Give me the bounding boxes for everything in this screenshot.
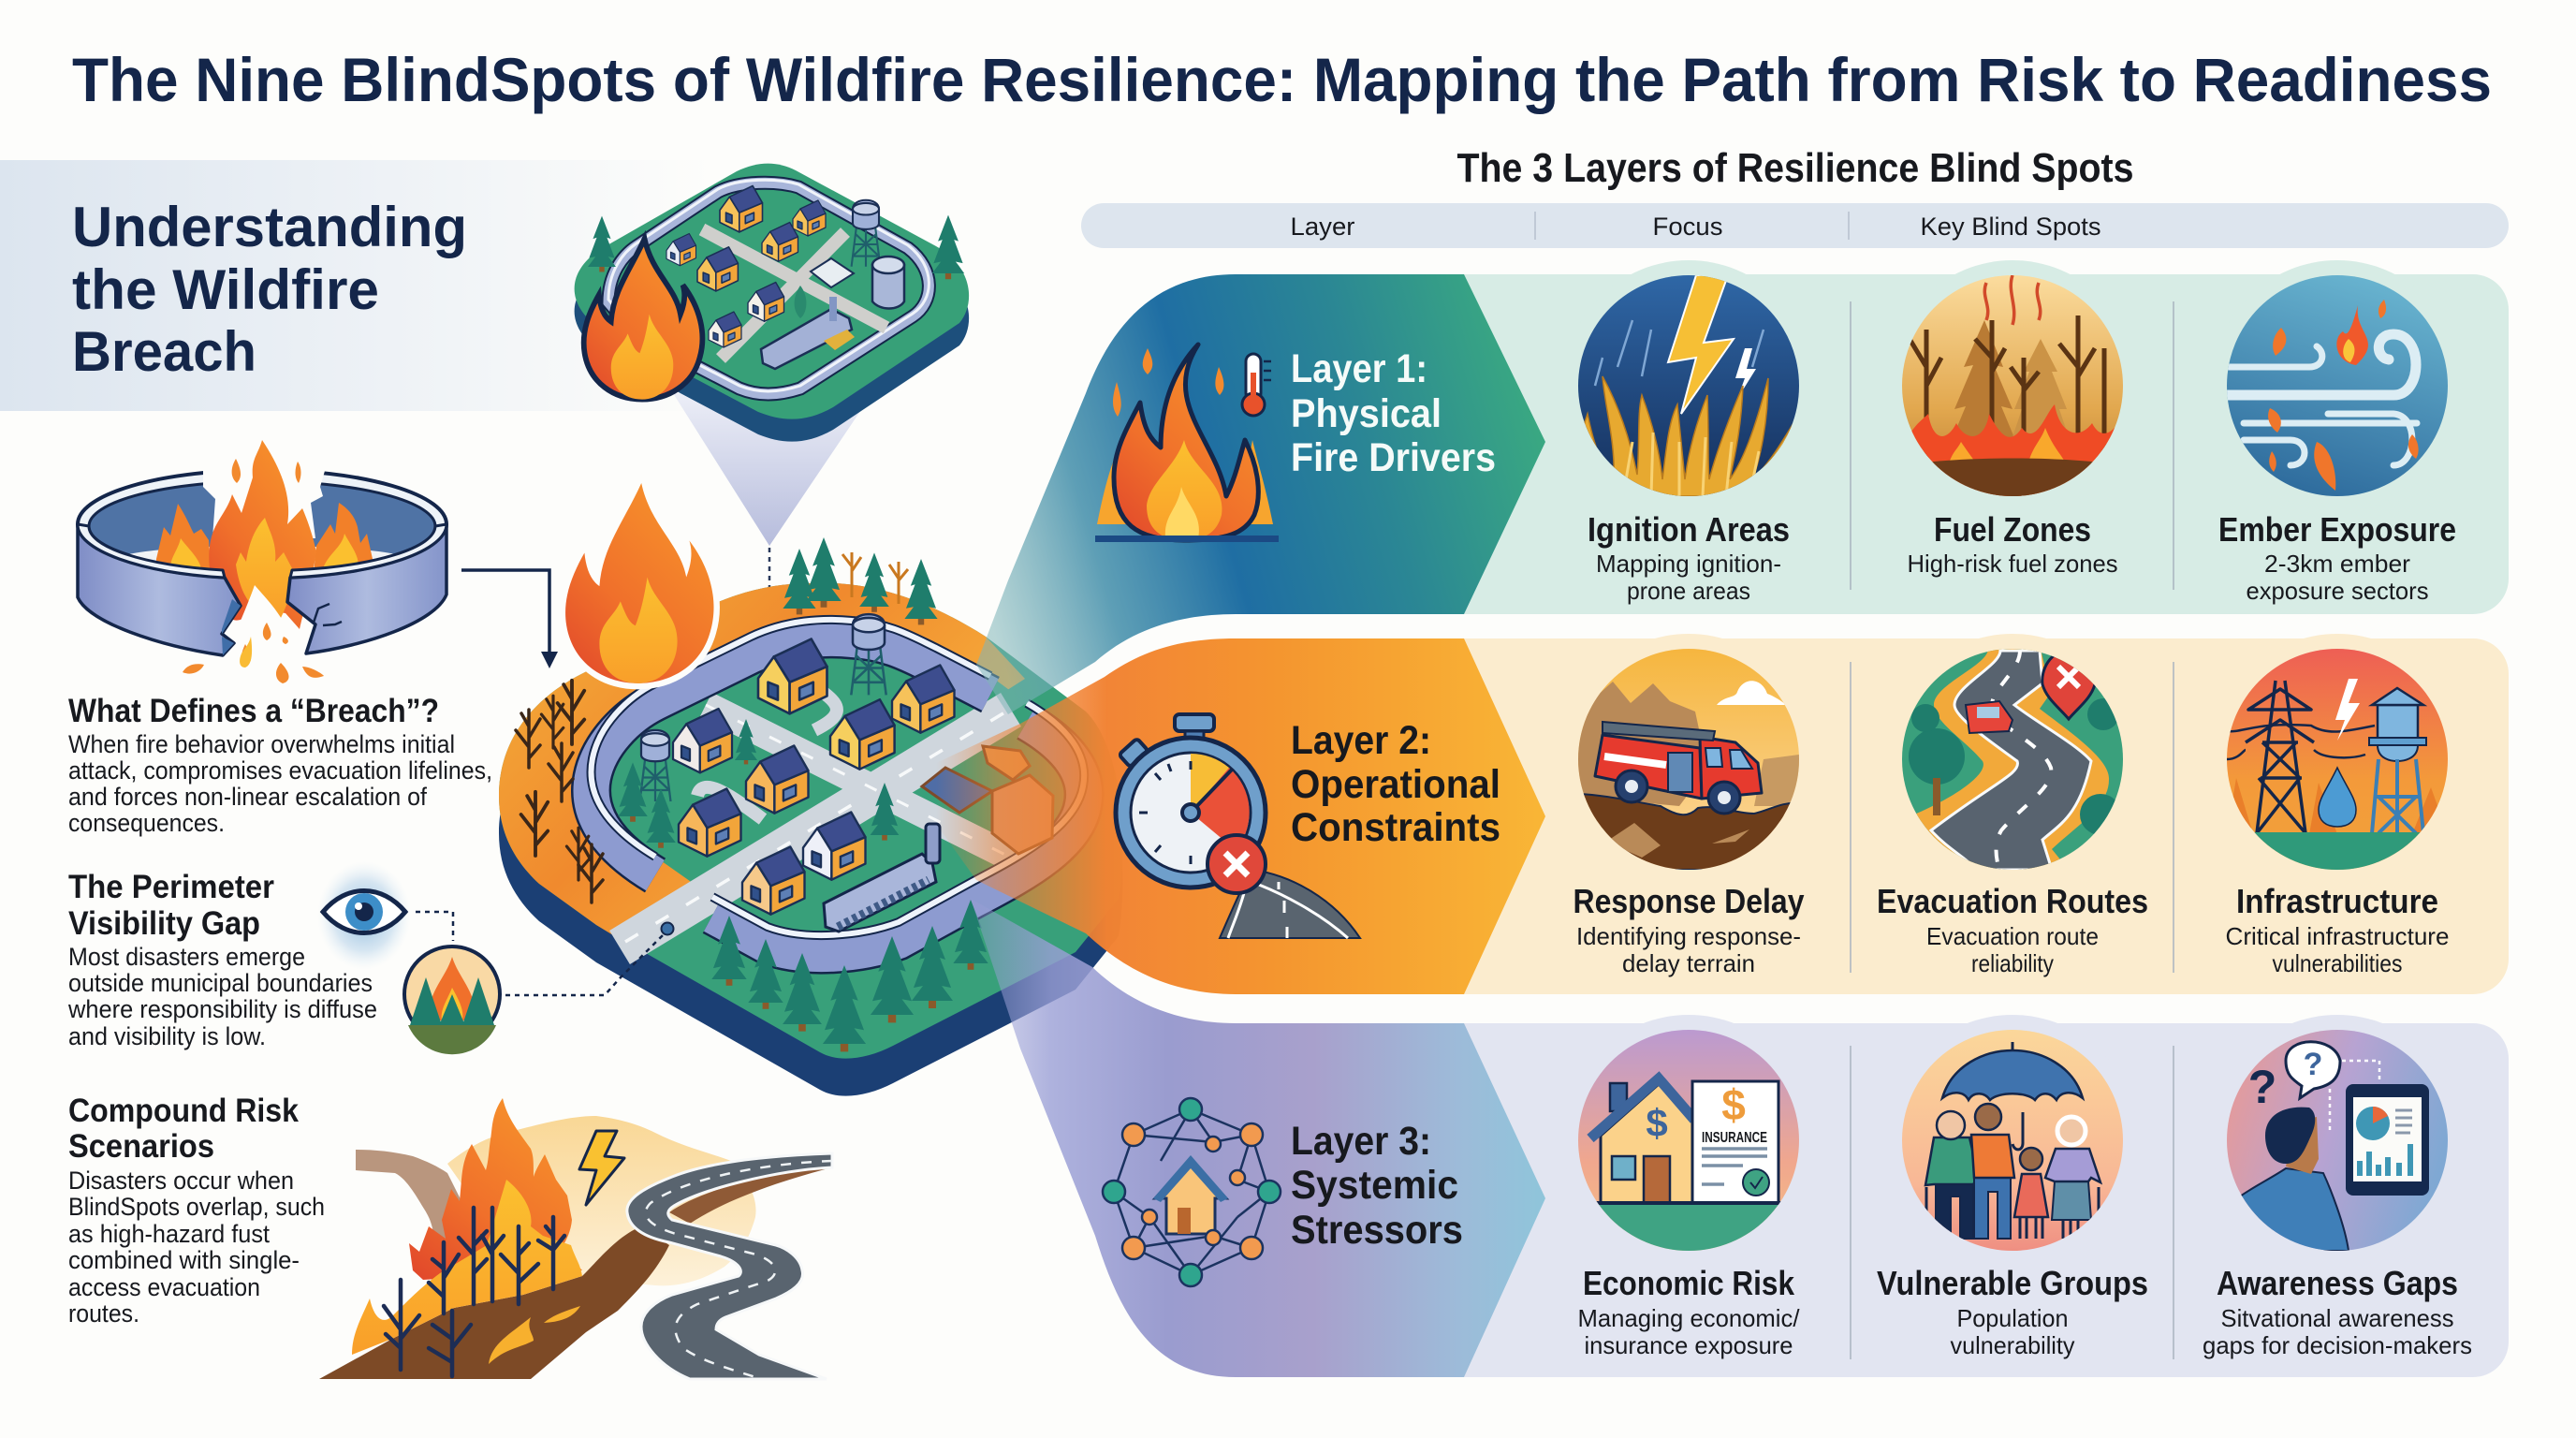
icon: economic risk circle: INSURANCE — [1702, 1130, 1767, 1146]
label row: layer 2 blind spots: Evacuation route — [1926, 922, 2099, 950]
label row: layer 3 blind spots — [1578, 1264, 2472, 1359]
table header pill: Focus — [1653, 213, 1722, 241]
label row: layer 2 blind spots: Identifying response- — [1576, 922, 1801, 950]
label row: layer 3 blind spots: insurance exposure — [1584, 1331, 1793, 1359]
label row: layer 1 blind spots — [1588, 510, 2456, 605]
text block: Compound Risk Scenarios: as high-hazard fust — [68, 1220, 271, 1248]
label row: layer 3 blind spots: Population — [1956, 1304, 2069, 1332]
label: layer 3 — [1291, 1119, 1463, 1253]
table heading: The 3 Layers of Resilience Blind Spots — [1456, 145, 2134, 191]
label row: layer 3 blind spots: Sitvational awareness — [2220, 1304, 2454, 1332]
icon: fuel zones circle — [1902, 275, 2123, 496]
text block: What Defines a Breach: consequences. — [68, 809, 225, 837]
icon: layer 1 flame and thermometer — [1095, 345, 1279, 542]
icon: layer 2 stopwatch with road — [1116, 714, 1360, 938]
section banner: Understanding the Wildfire Breach: Understanding — [72, 196, 467, 258]
label: layer 3: Stressors — [1291, 1208, 1463, 1253]
label: layer 1 — [1291, 346, 1496, 480]
label row: layer 1 blind spots: Ember Exposure — [2218, 510, 2456, 549]
beam: layer 1 chevron — [976, 274, 1545, 714]
icon: eye with glow — [317, 861, 411, 970]
label row: layer 2 blind spots: reliability — [1971, 949, 2054, 977]
label row: layer 1 blind spots: exposure sectors — [2247, 577, 2428, 605]
label row: layer 3 blind spots: vulnerability — [1951, 1331, 2074, 1359]
label row: layer 1 blind spots: prone areas — [1627, 577, 1750, 605]
panel: layer 1 background — [1217, 260, 2509, 614]
text block: What Defines a Breach: attack, compromises evacuation lifelines, — [68, 756, 492, 785]
icon: awareness gaps circle: ? — [2304, 1047, 2322, 1082]
title: The Nine BlindSpots of Wildfire Resilience: Mapping the Path from Risk to Readiness — [72, 45, 2492, 114]
label: layer 3: Layer 3: — [1291, 1119, 1431, 1164]
text block: Compound Risk Scenarios: Compound Risk — [68, 1093, 299, 1129]
beam: layer 3 chevron — [971, 899, 1545, 1377]
illustration: compound risk scene — [319, 1098, 832, 1379]
icon: large flame above town — [565, 483, 714, 683]
label row: layer 1 blind spots: Ignition Areas — [1588, 510, 1790, 549]
label row: layer 2 blind spots: Infrastructure — [2236, 882, 2438, 920]
label row: layer 1 blind spots: High-risk fuel zones — [1908, 550, 2117, 578]
icon: response delay circle — [1578, 649, 1799, 870]
text block: The Perimeter Visibility Gap: Most disasters emerge — [68, 943, 305, 971]
panel: layer 2 background — [1217, 634, 2509, 994]
text block: The Perimeter Visibility Gap: and visibility is low. — [68, 1022, 266, 1050]
beam: layer 2 chevron — [936, 638, 1545, 994]
label row: layer 3 blind spots: Awareness Gaps — [2217, 1264, 2458, 1302]
label: layer 1: Layer 1: — [1291, 346, 1427, 391]
icon: perimeter forest fire badge — [404, 946, 500, 1054]
panel: layer 3 background — [1217, 1015, 2509, 1377]
text block: What Defines a Breach: What Defines a “Breach”? — [68, 693, 439, 729]
funnel triangle from small town to main town — [673, 393, 872, 623]
label row: layer 2 blind spots: Critical infrastructure — [2226, 922, 2449, 950]
label row: layer 2 blind spots: Response Delay — [1573, 882, 1805, 920]
label: layer 3: Systemic — [1291, 1163, 1458, 1208]
text block: What Defines a Breach — [68, 693, 492, 837]
text block: The Perimeter Visibility Gap: Visibility Gap — [68, 905, 260, 942]
icon: awareness gaps circle — [2227, 1030, 2448, 1251]
text block: Compound Risk Scenarios: Scenarios — [68, 1128, 214, 1165]
illustration: main town isometric — [499, 537, 1122, 1096]
table header pill: Key Blind Spots — [1921, 213, 2100, 241]
label row: layer 2 blind spots: delay terrain — [1622, 949, 1755, 977]
icon: evacuation routes circle — [1902, 649, 2123, 870]
label row: layer 3 blind spots: gaps for decision-makers — [2203, 1331, 2472, 1359]
icon: breached perimeter ring — [78, 440, 446, 683]
arrow: breach to main town — [461, 570, 558, 668]
label row: layer 1 blind spots: Fuel Zones — [1934, 510, 2091, 549]
icon: ignition areas circle — [1578, 275, 1799, 496]
text block: The Perimeter Visibility Gap — [67, 869, 377, 1050]
table header pill: Layer — [1290, 213, 1355, 241]
label row: layer 3 blind spots: Economic Risk — [1583, 1264, 1795, 1302]
label: layer 2: Operational — [1291, 762, 1500, 807]
icon: flame on small town — [584, 239, 702, 400]
column dividers — [1851, 301, 2174, 1359]
label: layer 2 — [1291, 718, 1500, 850]
label: layer 1: Physical — [1291, 391, 1442, 436]
icon: economic risk circle — [1578, 1030, 1801, 1251]
label: layer 2: Layer 2: — [1291, 718, 1431, 763]
section banner: Understanding the Wildfire Breach: the Wildfire — [72, 258, 379, 321]
text block: Compound Risk Scenarios: access evacuation — [68, 1273, 260, 1301]
text block: The Perimeter Visibility Gap: The Perimeter — [68, 869, 274, 905]
text block: Compound Risk Scenarios: routes. — [68, 1299, 139, 1328]
label row: layer 2 blind spots: vulnerabilities — [2273, 949, 2402, 977]
text block: The Perimeter Visibility Gap: outside municipal boundaries — [68, 969, 373, 997]
label row: layer 2 blind spots — [1573, 882, 2449, 977]
label row: layer 1 blind spots: Mapping ignition- — [1596, 550, 1781, 578]
text block: What Defines a Breach: and forces non-linear escalation of — [68, 783, 428, 811]
table header pill — [1081, 203, 2509, 248]
connector: eye to perimeter badge — [416, 912, 666, 995]
text block: Compound Risk Scenarios: Disasters occur when — [68, 1167, 294, 1195]
text block: What Defines a Breach: When fire behavior overwhelms initial — [68, 730, 455, 758]
label row: layer 3 blind spots: Managing economic/ — [1578, 1304, 1800, 1332]
text block: Compound Risk Scenarios: BlindSpots overlap, such — [68, 1193, 325, 1221]
icon: layer 3 network with house — [1103, 1098, 1281, 1286]
section banner: Understanding the Wildfire Breach: Breach — [72, 320, 256, 383]
icon: infrastructure circle — [2227, 649, 2448, 870]
section banner: Understanding the Wildfire Breach — [0, 160, 711, 411]
label row: layer 3 blind spots: Vulnerable Groups — [1877, 1264, 2148, 1302]
icon: vulnerable groups circle — [1902, 1030, 2123, 1251]
icon: economic risk circle: $ — [1646, 1101, 1668, 1145]
icon: economic risk circle: $ — [1721, 1080, 1746, 1129]
label row: layer 1 blind spots: 2-3km ember — [2264, 550, 2410, 578]
label row: layer 2 blind spots: Evacuation Routes — [1877, 882, 2148, 920]
label: layer 2: Constraints — [1291, 805, 1500, 850]
icon: ember exposure circle — [2227, 275, 2448, 496]
text block: The Perimeter Visibility Gap: where responsibility is diffuse — [67, 995, 377, 1023]
icon: awareness gaps circle: ? — [2248, 1061, 2276, 1113]
label: layer 1: Fire Drivers — [1291, 435, 1496, 480]
text block: Compound Risk Scenarios — [68, 1093, 325, 1328]
text block: Compound Risk Scenarios: combined with single- — [68, 1246, 300, 1274]
icon: small town overview — [575, 164, 969, 442]
